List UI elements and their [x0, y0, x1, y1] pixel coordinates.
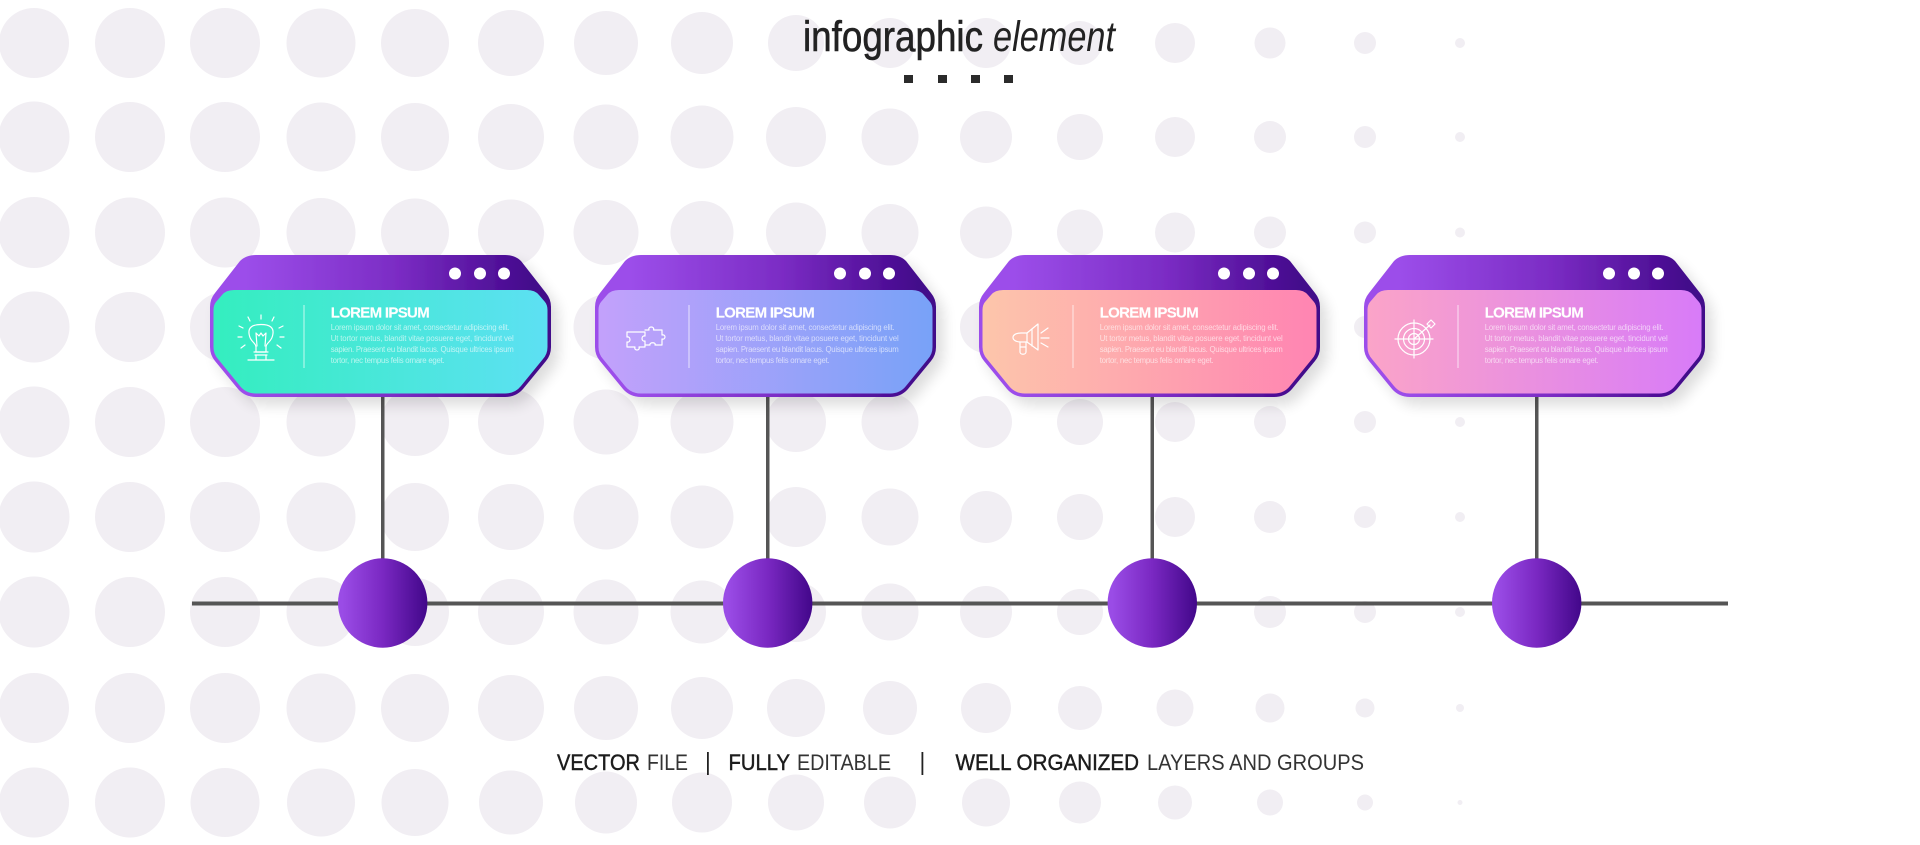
- body text: tortor, nec tempus felis ornare eget.: [331, 356, 445, 365]
- body text: Lorem ipsum dolor sit amet, consectetur adipiscing elit.: [1100, 323, 1279, 332]
- heading: LOREM IPSUM: [1485, 304, 1584, 322]
- body text: [331, 323, 514, 365]
- panel: card 4: [1364, 255, 1705, 397]
- connector 1: [381, 395, 384, 565]
- panel: card 3: [979, 255, 1320, 397]
- body text: [1485, 323, 1668, 365]
- body text: Ut tortor metus, blandit vitae posuere eget, tincidunt vel: [331, 334, 514, 343]
- body text: Lorem ipsum dolor sit amet, consectetur adipiscing elit.: [331, 323, 510, 332]
- icon: megaphone: [1013, 324, 1049, 354]
- body text: tortor, nec tempus felis ornare eget.: [1100, 356, 1214, 365]
- background dot pattern: [0, 8, 1465, 838]
- body text: [1100, 323, 1283, 365]
- body text: sapien. Praesent eu blandit lacus. Quisque ultrices ipsum: [1100, 345, 1283, 354]
- body text: sapien. Praesent eu blandit lacus. Quisque ultrices ipsum: [331, 345, 514, 354]
- icon: puzzle: [627, 327, 665, 350]
- icon: target: [1395, 320, 1435, 358]
- footer feature line: WELL ORGANIZED: [956, 750, 1139, 775]
- body text: Lorem ipsum dolor sit amet, consectetur adipiscing elit.: [1485, 323, 1664, 332]
- timeline node 3: [1108, 558, 1197, 648]
- body text: Ut tortor metus, blandit vitae posuere eget, tincidunt vel: [716, 334, 899, 343]
- icon: light bulb: [238, 315, 284, 360]
- body text: sapien. Praesent eu blandit lacus. Quisque ultrices ipsum: [716, 345, 899, 354]
- footer feature line: LAYERS AND GROUPS: [1147, 750, 1364, 775]
- body text: Lorem ipsum dolor sit amet, consectetur adipiscing elit.: [716, 323, 895, 332]
- body text: Ut tortor metus, blandit vitae posuere eget, tincidunt vel: [1485, 334, 1668, 343]
- connector 3: [1150, 395, 1154, 565]
- body text: tortor, nec tempus felis ornare eget.: [1485, 356, 1599, 365]
- title: [803, 13, 1117, 61]
- connector 4: [1535, 395, 1538, 565]
- footer feature line: VECTOR: [557, 750, 640, 775]
- timeline node 1: [338, 558, 427, 648]
- footer feature line: EDITABLE: [797, 750, 891, 775]
- panel: card 1: [210, 255, 551, 397]
- timeline node 2: [723, 558, 812, 648]
- body text: sapien. Praesent eu blandit lacus. Quisque ultrices ipsum: [1485, 345, 1668, 354]
- title: infographic: [803, 13, 983, 61]
- heading: LOREM IPSUM: [716, 304, 815, 322]
- heading: LOREM IPSUM: [331, 304, 430, 322]
- timeline node 4: [1492, 558, 1581, 648]
- body text: Ut tortor metus, blandit vitae posuere eget, tincidunt vel: [1100, 334, 1283, 343]
- connector 2: [766, 395, 770, 565]
- timeline axis: [192, 602, 1728, 606]
- body text: tortor, nec tempus felis ornare eget.: [716, 356, 830, 365]
- heading: LOREM IPSUM: [1100, 304, 1199, 322]
- footer feature line: [557, 750, 1364, 775]
- footer feature line: FULLY: [728, 750, 790, 775]
- footer feature line: FILE: [647, 750, 688, 775]
- body text: [716, 323, 899, 365]
- panel: card 2: [595, 255, 936, 397]
- title: element: [993, 13, 1117, 61]
- title square markers: [904, 75, 1013, 83]
